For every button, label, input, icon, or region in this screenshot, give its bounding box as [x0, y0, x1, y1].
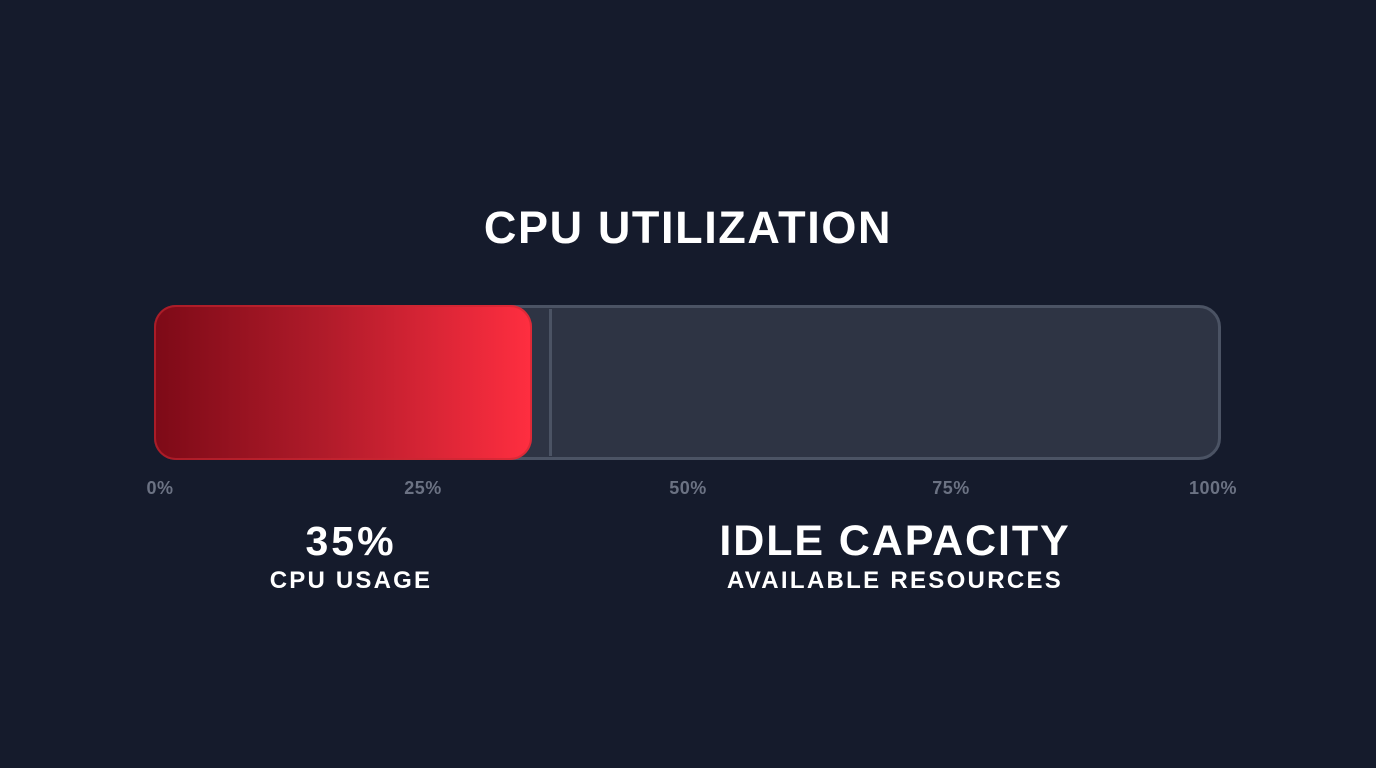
text: 0% — [146, 478, 174, 498]
axis ticks — [146, 478, 1237, 498]
text: 100% — [1189, 478, 1237, 498]
callout: idle capacity: IDLE CAPACITY — [719, 517, 1071, 565]
callout: cpu usage: 35% — [305, 518, 397, 564]
callout: cpu usage — [270, 518, 432, 594]
divider marker — [549, 309, 552, 456]
callout: idle capacity: AVAILABLE RESOURCES — [727, 567, 1063, 594]
progress bar — [154, 305, 1221, 460]
title: CPU UTILIZATION — [484, 202, 892, 253]
text: 25% — [404, 478, 442, 498]
red fill: 35% — [154, 305, 532, 460]
callout: cpu usage: CPU USAGE — [270, 567, 432, 594]
bar track — [154, 305, 1221, 460]
text: 50% — [669, 478, 707, 498]
callout: idle capacity — [719, 517, 1071, 594]
text: 75% — [932, 478, 970, 498]
